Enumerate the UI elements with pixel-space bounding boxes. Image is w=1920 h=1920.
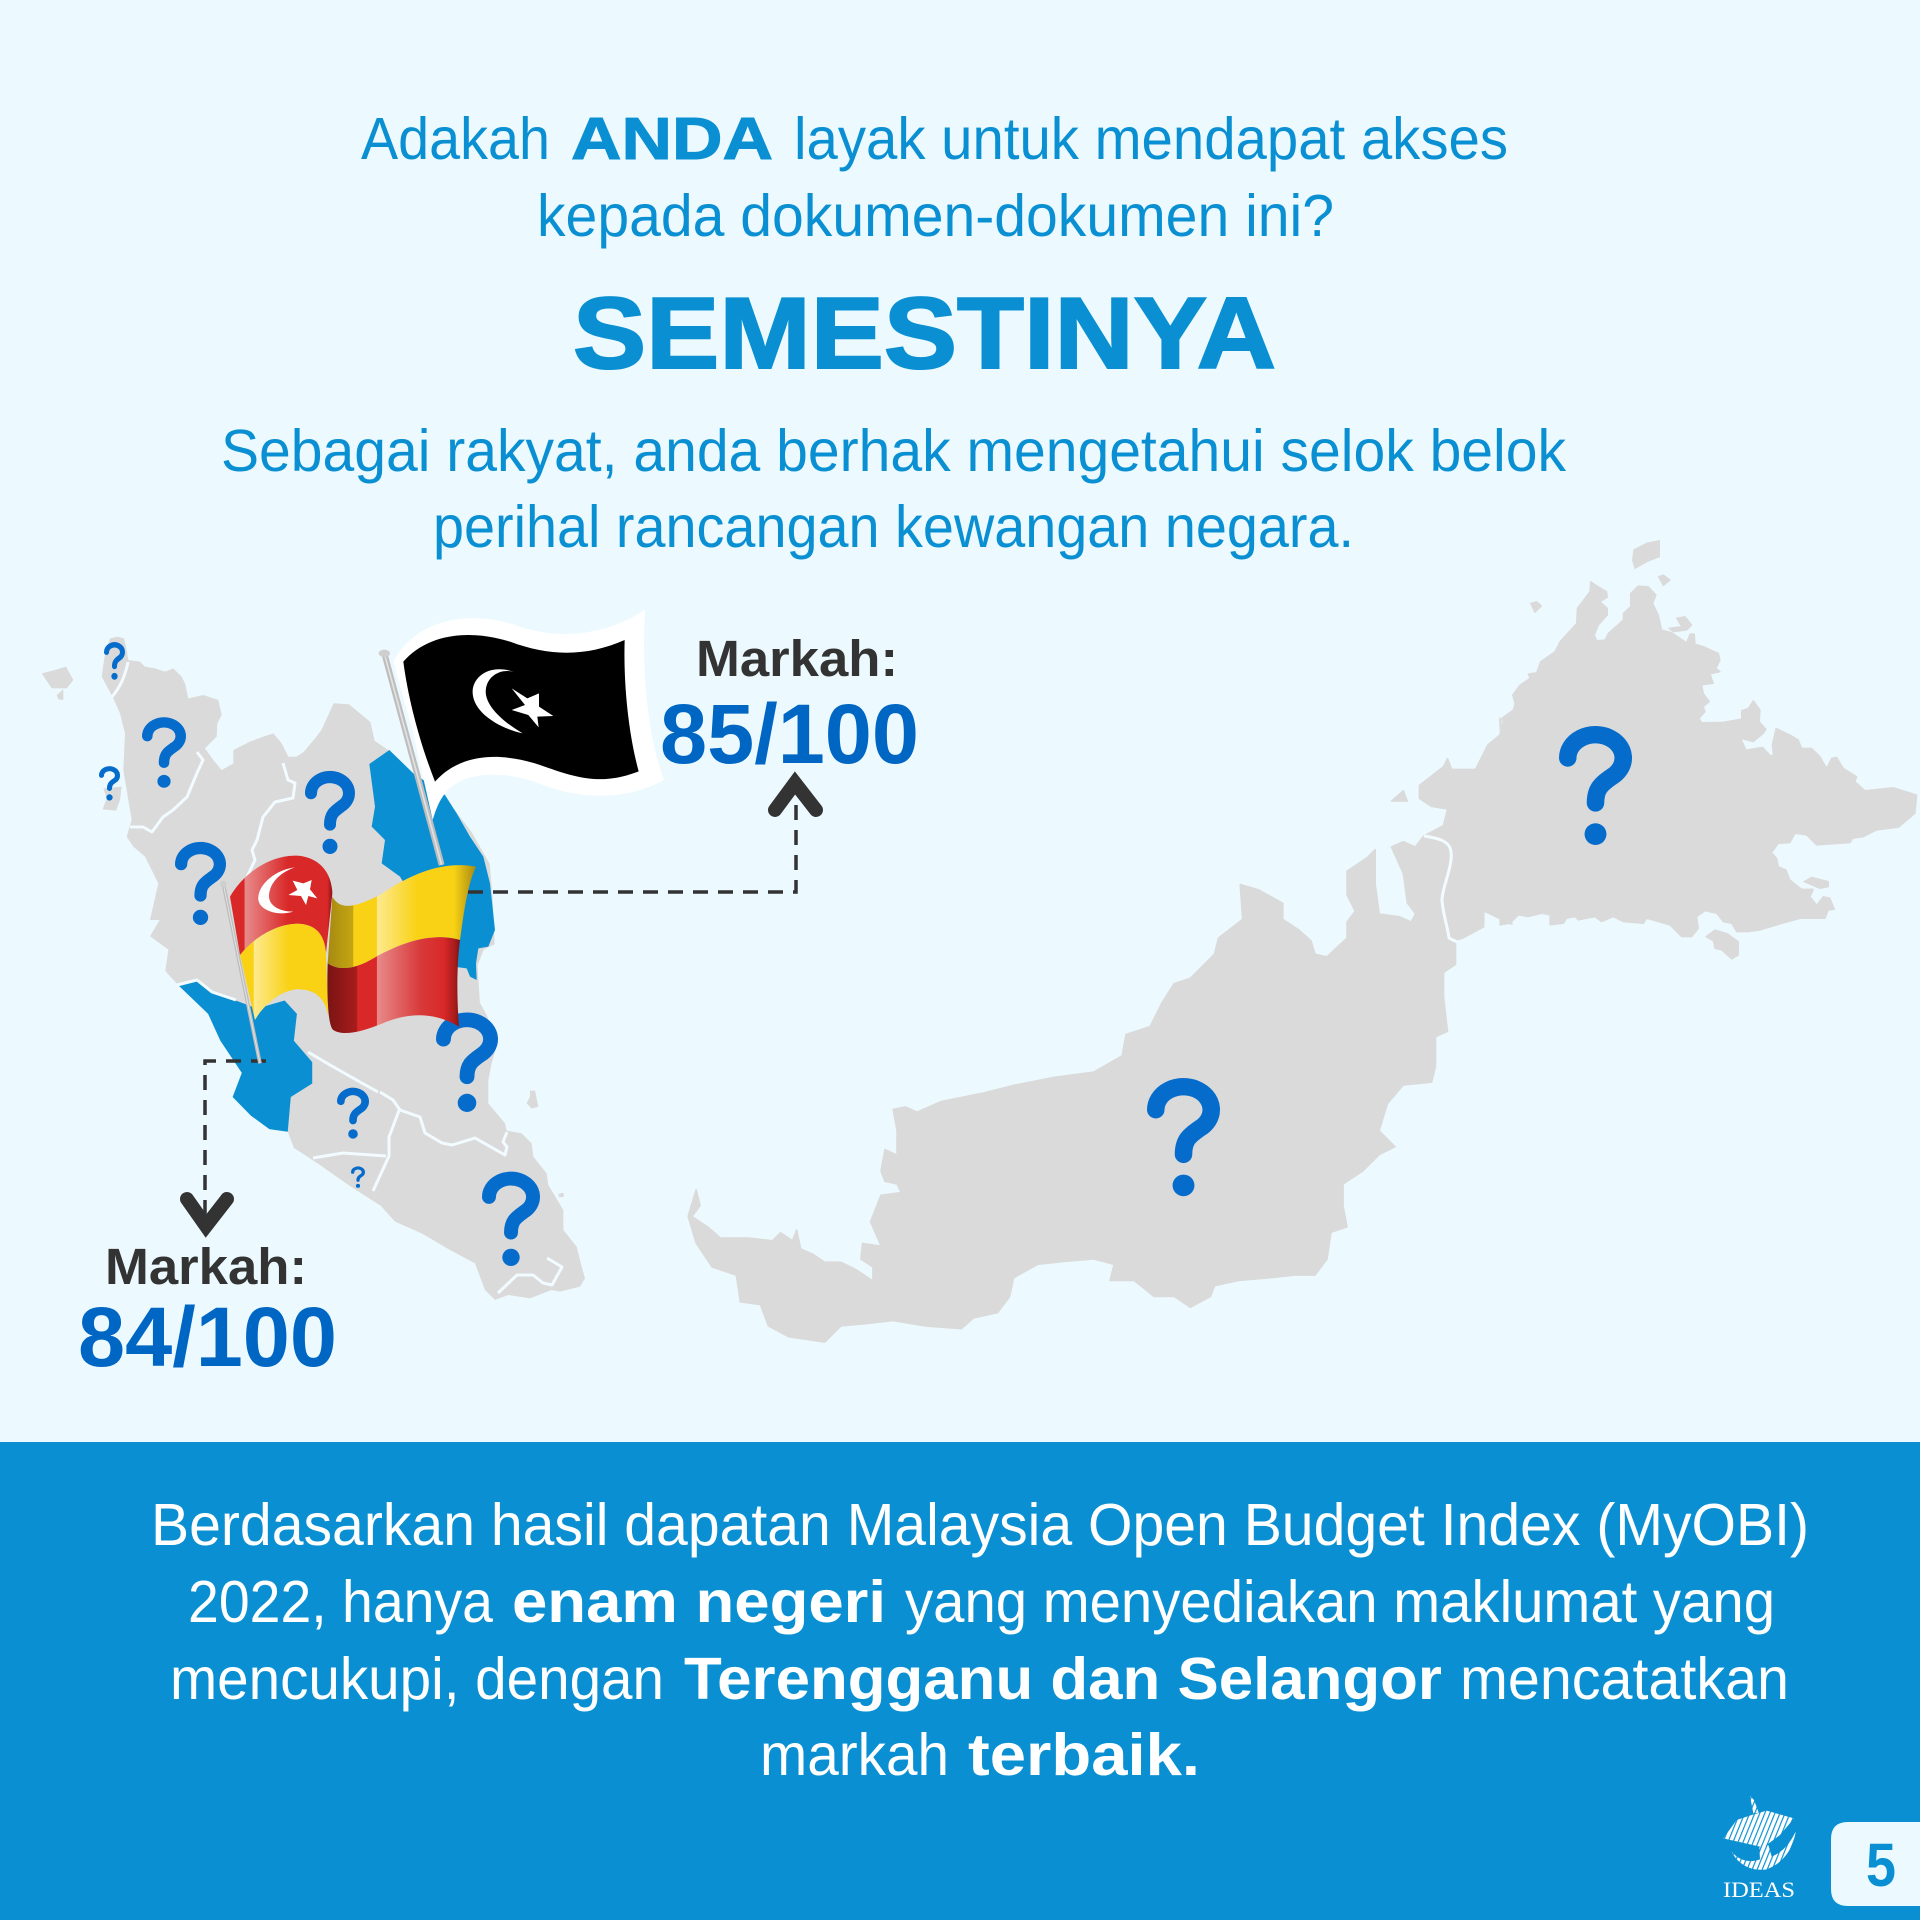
crescent: [258, 867, 295, 913]
icon: question mark Johor: [489, 1179, 533, 1266]
heading question: ANDA: [571, 106, 773, 172]
flag: Terengganu: [379, 610, 664, 865]
map: Sarawak: [688, 718, 1512, 1342]
logo: IDEAS: [1723, 1796, 1796, 1902]
score: Selangor: [78, 1238, 337, 1384]
headline: SEMESTINYA: SEMESTINYA: [573, 278, 1276, 390]
state: Selangor highlighted: [178, 979, 312, 1132]
score: Terengganu: [660, 630, 919, 781]
flag black field: [403, 635, 639, 782]
flag pole: [384, 653, 442, 865]
border: Sarawak / Sabah: [1424, 836, 1457, 942]
summary text: Berdasarkan hasil dapatan Malaysia Open Budget Index (MyOBI): [151, 1492, 1809, 1558]
state borders: [112, 662, 562, 1293]
heading question: kepada dokumen-dokumen ini?: [537, 183, 1334, 249]
icon: bird: [1723, 1796, 1796, 1870]
heading question: layak untuk mendapat akses: [794, 106, 1508, 172]
map: Peninsular Malaysia: [42, 637, 585, 1300]
icon: question mark Melaka: [353, 1168, 363, 1188]
summary text: markah: [760, 1722, 949, 1788]
icon: question mark Negeri Sembilan: [341, 1091, 365, 1139]
icon: question mark Kelantan: [311, 777, 349, 854]
summary text: mencukupi, dengan: [170, 1646, 664, 1712]
summary text: Terengganu dan Selangor: [684, 1646, 1442, 1712]
heading question: Adakah: [361, 106, 550, 172]
summary text: [151, 1492, 1809, 1788]
flag: Selangor: [220, 856, 476, 1063]
arrow: up to Terengganu score: [775, 783, 816, 810]
heading question: [361, 106, 1508, 249]
icon: question mark Sarawak: [1156, 1087, 1211, 1196]
score: Selangor: 84/100: [78, 1290, 337, 1384]
subheading: perihal rancangan kewangan negara.: [433, 494, 1354, 560]
dashed connector: Selangor to score: [205, 1061, 266, 1215]
map: Sabah: [1500, 541, 1917, 959]
icon: question mark Sabah: [1568, 735, 1623, 845]
score: Terengganu: Markah:: [696, 630, 898, 687]
icon: question mark Perak: [181, 848, 220, 925]
summary text: yang menyediakan maklumat yang: [905, 1569, 1775, 1635]
page number tab: [1831, 1822, 1920, 1906]
subheading: Sebagai rakyat, anda berhak mengetahui selok belok: [221, 418, 1566, 484]
icon: question mark Kedah: [147, 722, 181, 788]
score: Selangor: Markah:: [105, 1238, 307, 1295]
score: Terengganu: 85/100: [660, 687, 919, 781]
panel: bottom summary band: [0, 1442, 1920, 1920]
page number tab: 5: [1866, 1831, 1896, 1899]
subheading: [221, 418, 1566, 560]
logo: IDEAS: IDEAS: [1723, 1877, 1795, 1902]
star: [288, 880, 317, 905]
arrow: down to Selangor score: [187, 1199, 227, 1226]
dashed connector: Terengganu to score: [468, 800, 796, 892]
question marks: [102, 645, 1623, 1266]
summary text: enam negeri: [512, 1569, 886, 1635]
summary text: 2022, hanya: [188, 1569, 493, 1635]
map: Malaysia: [42, 541, 1917, 1342]
flag white outline: [393, 610, 664, 820]
icon: question mark Pahang: [443, 1020, 491, 1112]
summary text: terbaik.: [968, 1722, 1200, 1788]
summary text: mencatatkan: [1460, 1646, 1789, 1712]
icon: question mark Pulau Pinang: [102, 769, 117, 801]
flag pole: [223, 884, 260, 1063]
icon: question mark Perlis: [107, 645, 122, 680]
crescent: [473, 669, 523, 733]
state: Terengganu highlighted: [369, 750, 495, 980]
star: [512, 688, 553, 727]
